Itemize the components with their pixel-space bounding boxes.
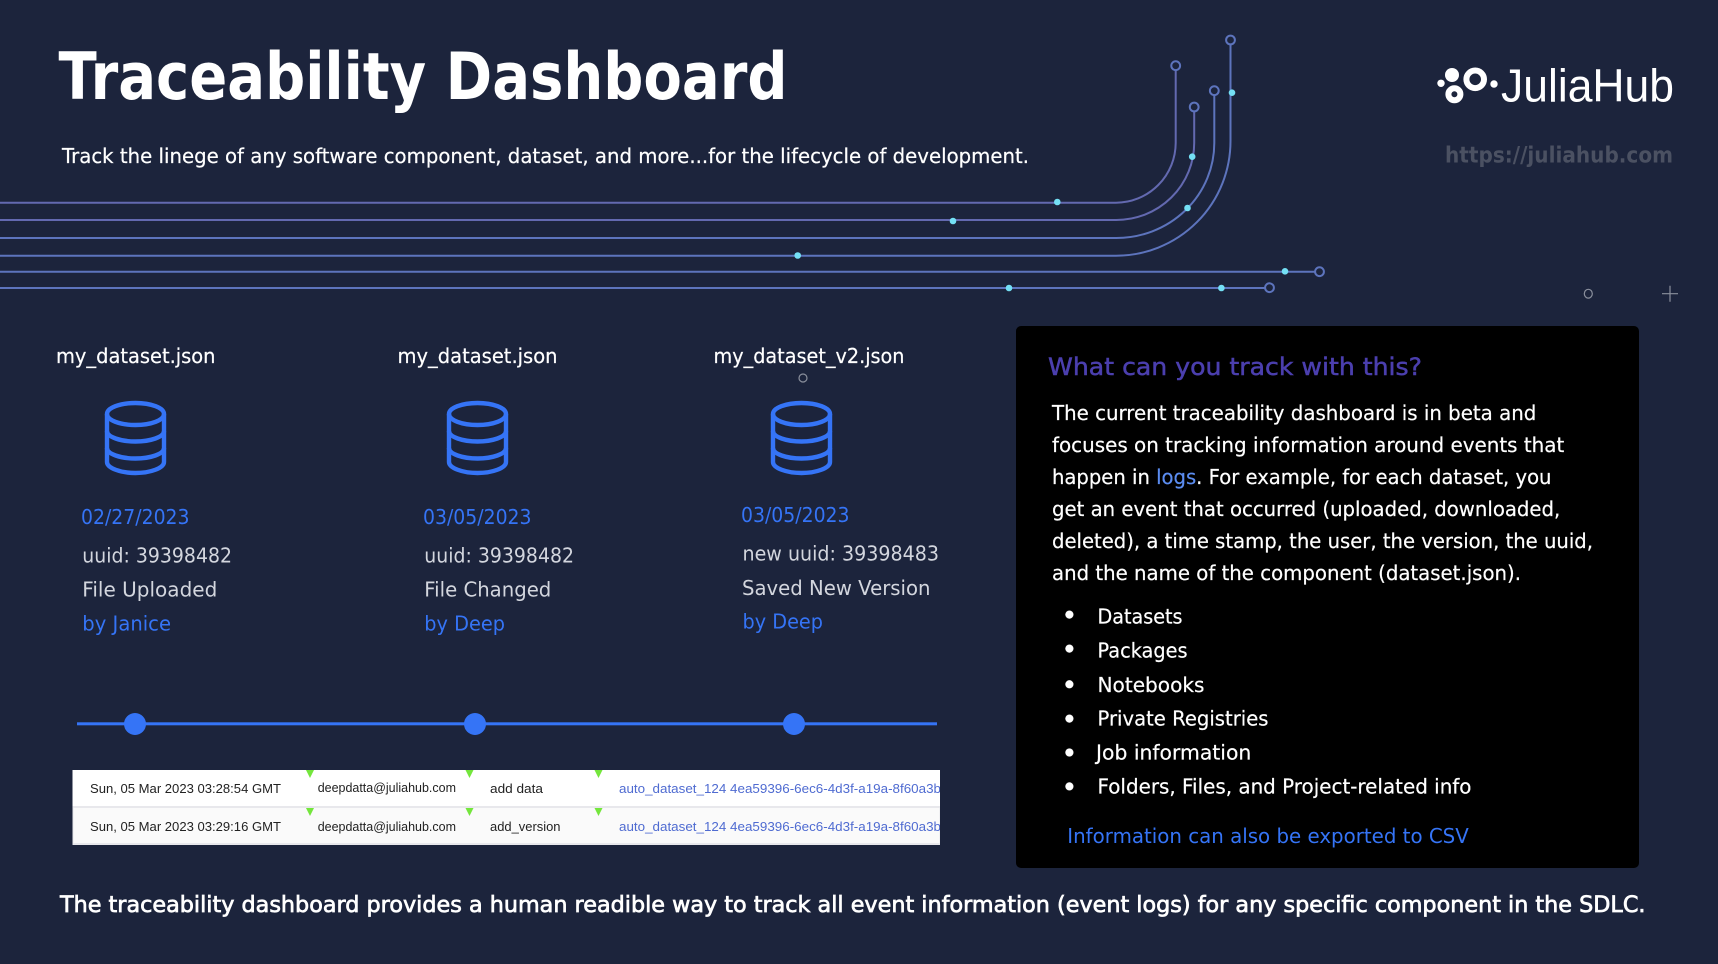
- table row 2: deepdatta@juliahub.com: [318, 820, 456, 834]
- event 3: new version: new uuid: 39398483: [742, 542, 939, 566]
- trackable items list: Notebooks: [1098, 673, 1204, 697]
- event 3: new version: Saved New Version: [742, 576, 930, 600]
- event 2: file change: uuid: 39398482: [424, 544, 574, 568]
- table row 2: add_version: [490, 820, 561, 834]
- panel description: and the name of the component (dataset.json).: [1052, 561, 1521, 585]
- panel: what can you track: [1016, 326, 1639, 868]
- trackable items list: Datasets: [1098, 605, 1182, 629]
- icon: database: [449, 403, 506, 473]
- event 3: new version: 03/05/2023: [741, 503, 850, 527]
- event 1: file upload: my_dataset.json: [56, 344, 216, 368]
- event 2: file change: File Changed: [424, 578, 551, 602]
- event 3: new version: [714, 344, 939, 634]
- panel description: [1051, 401, 1593, 585]
- panel heading: What can you track with this?: [1048, 353, 1422, 381]
- event 1: file upload: [56, 344, 232, 636]
- event 2: file change: by Deep: [424, 612, 505, 636]
- table row 1: [90, 782, 940, 796]
- icon: database: [773, 403, 830, 473]
- icon: database: [107, 403, 164, 473]
- event 3: new version: my_dataset_v2.json: [714, 344, 904, 368]
- title: Traceability Dashboard: [58, 40, 788, 115]
- timeline: [77, 713, 937, 735]
- event 2: file change: 03/05/2023: [423, 505, 532, 529]
- table row 1: auto_dataset_124 4ea59396-6ec6-4d3f-a19a-8f60a3b: [619, 782, 941, 796]
- table row 2: [90, 822, 940, 834]
- website url: https://juliahub.com: [1445, 144, 1673, 168]
- trackable items list: Job information: [1094, 741, 1251, 765]
- export note: Information can also be exported to CSV: [1067, 824, 1469, 848]
- trackable items list: Private Registries: [1098, 707, 1268, 731]
- panel description: happen in logs. For example, for each dataset, you: [1052, 465, 1552, 489]
- table row 2: auto_dataset_124 4ea59396-6ec6-4d3f-a19a-8f60a3b: [619, 820, 941, 834]
- subtitle: Track the linege of any software component, dataset, and more...for the lifecycle of development.: [61, 144, 1029, 168]
- panel description: deleted), a time stamp, the user, the version, the uuid,: [1052, 529, 1593, 553]
- filter markers: [306, 770, 602, 816]
- table row 1: Sun, 05 Mar 2023 03:28:54 GMT: [90, 782, 281, 796]
- panel description: The current traceability dashboard is in beta and: [1051, 401, 1536, 425]
- event 2: file change: [398, 344, 574, 636]
- table row 2: Sun, 05 Mar 2023 03:29:16 GMT: [90, 820, 281, 834]
- event 1: file upload: 02/27/2023: [81, 505, 190, 529]
- event log table: [72, 770, 941, 845]
- event 3: new version: by Deep: [742, 610, 823, 634]
- trackable items list: Folders, Files, and Project-related info: [1098, 775, 1472, 799]
- event 2: file change: my_dataset.json: [398, 344, 558, 368]
- JuliaHub logo: JuliaHub: [1501, 60, 1674, 112]
- small ornaments: [799, 286, 1678, 382]
- event 1: file upload: File Uploaded: [82, 578, 217, 602]
- event 1: file upload: by Janice: [82, 612, 171, 636]
- trackable items list: Packages: [1098, 638, 1188, 662]
- circuit line decoration: [0, 36, 1324, 292]
- panel description: get an event that occurred (uploaded, downloaded,: [1052, 497, 1560, 521]
- panel description: focuses on tracking information around events that: [1052, 433, 1564, 457]
- event 1: file upload: uuid: 39398482: [82, 544, 232, 568]
- table row 1: deepdatta@juliahub.com: [318, 781, 456, 795]
- table row 1: add data: [490, 782, 543, 796]
- trackable items list: [1065, 605, 1472, 799]
- footer summary: The traceability dashboard provides a human readible way to track all event information (event logs) for any specific component in the SDLC.: [59, 893, 1646, 918]
